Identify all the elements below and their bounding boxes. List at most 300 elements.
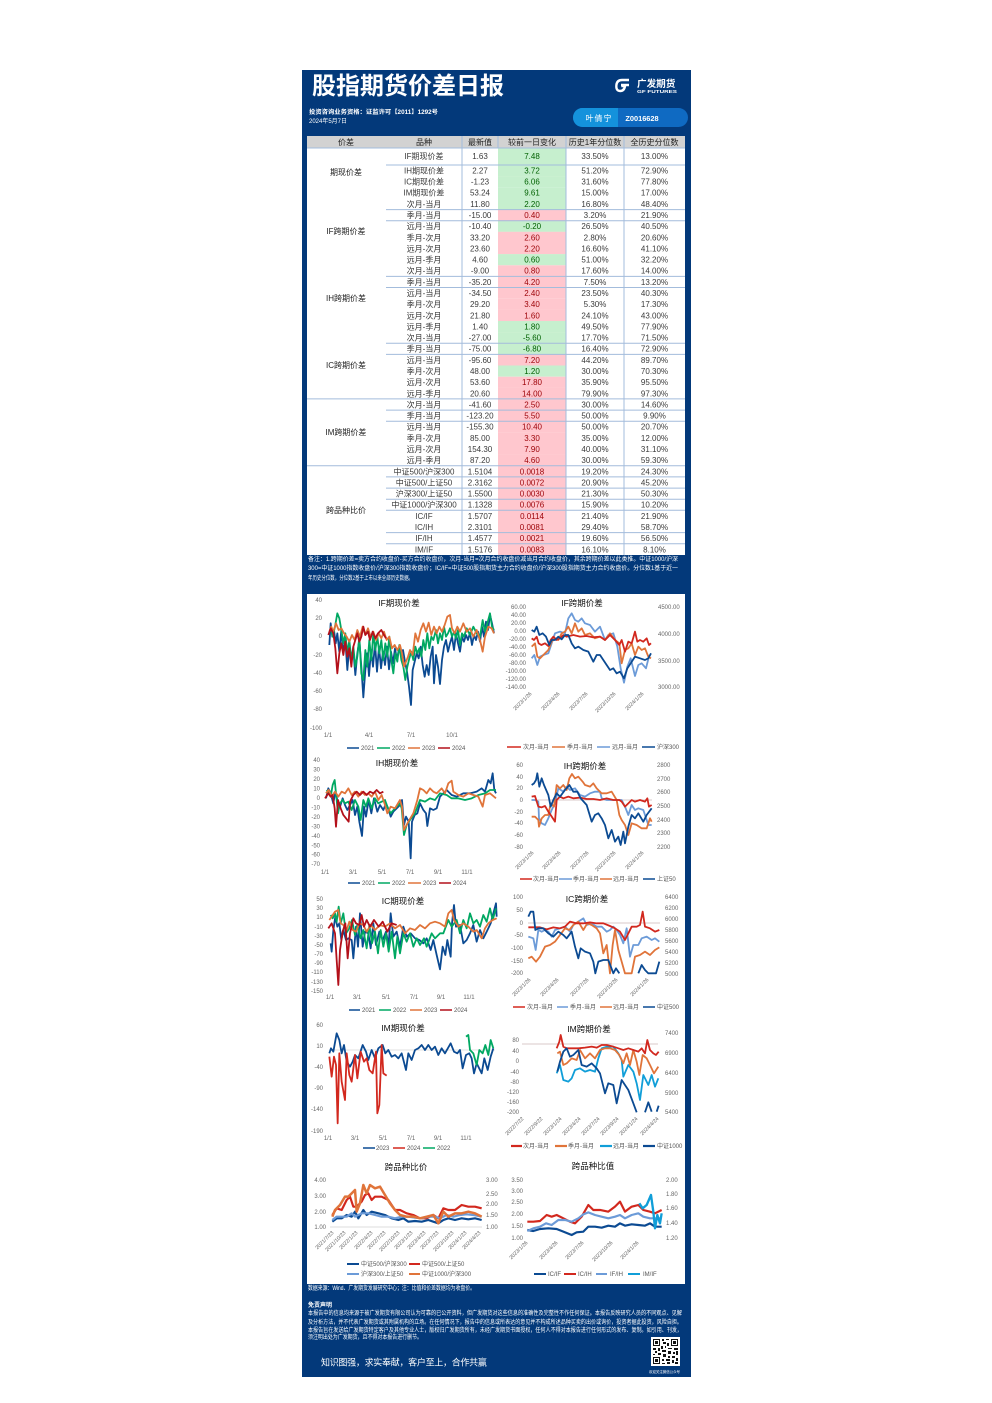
group: IC跨期价差: 48.00 — [470, 367, 491, 376]
table header row: 全历史分位数 — [630, 137, 678, 147]
chart: IM跨期价差: -40 — [510, 1070, 520, 1076]
chart: 跨品种比价: 4.00 — [314, 1178, 327, 1184]
group: 跨品种比价: 0.0018 — [520, 467, 545, 476]
chart: IF跨期价差: 2023/10/26 — [594, 691, 617, 714]
chart: 跨品种比价: 3.00 — [314, 1194, 327, 1200]
group: IC跨期价差: IC跨期价差 — [326, 360, 366, 370]
chart: IM跨期价差: IM跨期价差 — [567, 1024, 611, 1034]
group: 跨品种比价: 沪深300/上证50 — [396, 488, 453, 498]
group: 跨品种比价: 1.5104 — [468, 467, 493, 476]
data source: 数据来源：Wind、广发期货发展研究中心；注：比值和价差数据均为收盘价。 — [308, 1284, 475, 1292]
table header row: 价差 — [338, 137, 354, 147]
group: IF跨期价差: -0.20 — [523, 222, 542, 231]
chart: IF期现价差: IF期现价差 — [378, 598, 420, 608]
chart: IH期现价差: 7/1 — [406, 870, 415, 876]
chart: IH期现价差: -10 — [311, 806, 321, 812]
table note: 年历史分位数，分位数2基于上市以来全部历史数据。 — [308, 574, 413, 582]
chart: IC跨期价差: 0 — [520, 921, 524, 927]
chart: IM期现价差: 10 — [316, 1044, 324, 1050]
chart: IH跨期价差: IH跨期价差 — [564, 761, 606, 771]
chart: IM跨期价差: 2023/1/24 — [542, 1116, 563, 1137]
group: IM跨期价差: 59.30% — [641, 456, 668, 465]
group: IH跨期价差: -35.20 — [469, 278, 492, 287]
chart: 跨品种比价: 沪深300/上证50 — [361, 1270, 404, 1278]
group: 跨品种比价: 8.10% — [643, 545, 666, 554]
group: IF跨期价差: 41.10% — [641, 244, 668, 253]
chart: IH跨期价差: 2700 — [657, 777, 671, 783]
group: 跨品种比价: 2.3162 — [468, 478, 493, 487]
group: IC跨期价差: 季月-次月 — [407, 366, 441, 376]
chart: IM跨期价差: 2024/4/24 — [639, 1116, 660, 1137]
group: IH跨期价差: 2.40 — [524, 289, 540, 298]
chart: IC跨期价差: 2023/7/26 — [569, 977, 590, 998]
group: 跨品种比价: 21.90% — [641, 512, 668, 521]
chart: 跨品种比值: 1.50 — [511, 1224, 524, 1230]
chart: IF跨期价差: 2023/7/26 — [568, 691, 589, 712]
chart: IF跨期价差: 3500.00 — [658, 659, 680, 665]
chart: 跨品种比值: IC/IH — [578, 1272, 592, 1278]
group: 期现价差: 2.27 — [472, 166, 488, 175]
chart: IC跨期价差: -150 — [511, 959, 524, 965]
chart: IC期现价差: -30 — [314, 934, 324, 940]
chart: IH跨期价差: 2023/1/26 — [514, 850, 535, 871]
chart: IH期现价差: 20 — [313, 777, 321, 783]
chart: IH期现价差: 10 — [313, 786, 321, 792]
group: 跨品种比价: IC/IH — [415, 523, 433, 532]
chart: IF期现价差: -80 — [313, 707, 323, 713]
disclaimer: 及分析方法，并不代表广发期货或其附属机构的立场。在任何情况下，报告中的信息或所表达的意见并不构成所述品种买卖的出价或询价，投资者据此投资，风险自担。 — [308, 1318, 682, 1326]
chart: IC跨期价差: -200 — [511, 971, 524, 977]
charts panel — [307, 594, 685, 1284]
chart: 跨品种比值: 跨品种比值 — [572, 1161, 615, 1171]
group: IF跨期价差: 33.20 — [470, 233, 491, 242]
chart: IM跨期价差: 中证1000 — [657, 1142, 683, 1150]
table header row: 最新值 — [468, 137, 492, 147]
group: 跨品种比价: 21.40% — [581, 512, 609, 521]
group: 期现价差: -1.23 — [471, 178, 490, 186]
chart: IM期现价差: 1/1 — [324, 1136, 333, 1142]
group: 跨品种比价: 24.30% — [641, 467, 668, 476]
chart: IM跨期价差: 5900 — [665, 1091, 679, 1097]
group: IM跨期价差: 远月-次月 — [407, 444, 441, 454]
group: IH跨期价差: -9.00 — [471, 267, 490, 276]
group: IH跨期价差: 21.80 — [470, 311, 491, 320]
group: IH跨期价差: 49.50% — [581, 322, 609, 331]
group: 跨品种比价: 58.70% — [641, 523, 668, 532]
group: IM跨期价差: 14.60% — [641, 400, 668, 409]
chart: IM期现价差: 7/1 — [407, 1136, 416, 1142]
group: IH跨期价差: 77.90% — [641, 322, 668, 331]
group: 跨品种比价: 15.90% — [581, 501, 609, 510]
group: IH跨期价差: 3.40 — [524, 300, 540, 309]
group: 期现价差: 17.00% — [641, 189, 668, 198]
group: 跨品种比价: 中证500/沪深300 — [394, 466, 455, 476]
chart: IH期现价差: 3/1 — [349, 870, 358, 876]
group: IM跨期价差: 35.00% — [581, 434, 609, 443]
disclaimer — [308, 1301, 682, 1341]
chart: IM跨期价差: 2022/9/22 — [523, 1116, 544, 1137]
chart: IH期现价差: 2023 — [423, 881, 437, 887]
chart: IH期现价差: 0 — [317, 796, 321, 802]
chart: IC跨期价差: 5800 — [665, 928, 679, 934]
group: IF跨期价差: 季月-当月 — [407, 210, 441, 220]
group: 跨品种比价: 0.0081 — [520, 523, 545, 532]
chart: IM期现价差: 11/1 — [460, 1136, 472, 1142]
chart: IC期现价差: -10 — [314, 925, 324, 931]
chart: IH期现价差: IH期现价差 — [376, 758, 418, 768]
chart: IM跨期价差: -160 — [507, 1100, 520, 1106]
chart: IF期现价差: 10/1 — [446, 733, 458, 739]
chart: IC跨期价差: 5000 — [665, 972, 679, 978]
group: IM跨期价差: 50.00% — [581, 412, 609, 420]
chart: IF期现价差: 4/1 — [365, 733, 374, 739]
group: IF跨期价差: 16.80% — [581, 200, 609, 209]
chart: IM跨期价差: -80 — [510, 1080, 520, 1086]
chart: IF期现价差: -20 — [313, 653, 323, 659]
chart: IC期现价差: -70 — [314, 952, 324, 958]
group: IM跨期价差: -41.60 — [469, 400, 492, 409]
group: IC跨期价差: 7.20 — [524, 356, 540, 365]
group: IF跨期价差 — [326, 198, 668, 265]
group: IC跨期价差: -75.00 — [469, 345, 492, 354]
group: 跨品种比价: 16.10% — [581, 545, 609, 554]
group: 跨品种比价: 中证1000/沪深300 — [391, 500, 457, 510]
group: IM跨期价差: 远月-当月 — [407, 422, 441, 432]
chart: 跨品种比价: 2024/1/23 — [447, 1230, 468, 1251]
group: 跨品种比价: 0.0072 — [520, 478, 545, 487]
chart: IM跨期价差: 2023/9/24 — [599, 1116, 620, 1137]
table note: 备注：1.跨期价差=卖方合约收盘价-买方合约收盘价，次月-当月=次月合约收盘价减当月合约收盘价，其余跨期价差以此类推。中证1000/沪深 — [308, 555, 678, 563]
group: IM跨期价差: 9.90% — [643, 412, 666, 420]
group: IM跨期价差: 87.20 — [470, 456, 491, 465]
table background — [307, 148, 685, 555]
chart: 跨品种比价: 中证1000/沪深300 — [422, 1270, 472, 1278]
group: 期现价差: 51.20% — [581, 166, 609, 175]
chart: IH跨期价差: -40 — [514, 821, 524, 827]
chart: IH跨期价差: 2024/1/26 — [624, 850, 645, 871]
group: IC跨期价差: 远月-次月 — [407, 377, 441, 387]
group: IM跨期价差: IM跨期价差 — [326, 427, 366, 437]
chart: IF期现价差: -100 — [310, 726, 323, 732]
chart: 跨品种比值: 2024/1/26 — [619, 1240, 640, 1261]
chart: 跨品种比价: 3.00 — [486, 1178, 498, 1184]
chart: 跨品种比价: 2023/10/23 — [432, 1230, 455, 1253]
chart: IF跨期价差: IF跨期价差 — [561, 598, 603, 608]
chart: 跨品种比值: 2023/7/26 — [564, 1240, 585, 1261]
group: IM跨期价差: 85.00 — [470, 434, 491, 443]
chart: 跨品种比价: 中证500/沪深300 — [361, 1260, 407, 1268]
chart: IF跨期价差: 次月-当月 — [523, 743, 549, 751]
group: 跨品种比价: 0.0114 — [520, 512, 544, 521]
group: IM跨期价差: 远月-季月 — [407, 455, 441, 465]
chart: IH期现价差: -50 — [311, 844, 321, 850]
chart: IC跨期价差: 2023/10/26 — [596, 977, 619, 1000]
table header row: 历史1年分位数 — [569, 137, 621, 147]
group: 跨品种比价: 1.5500 — [468, 490, 493, 498]
chart: IC期现价差: 30 — [316, 906, 324, 912]
group: IC跨期价差: -27.00 — [469, 334, 492, 342]
chart: IM期现价差: -90 — [314, 1086, 324, 1092]
header — [309, 73, 688, 127]
chart: IM期现价差 — [311, 1023, 495, 1152]
group: IF跨期价差: 20.60% — [641, 233, 668, 242]
group: IH跨期价差: 1.40 — [472, 322, 488, 331]
chart: 跨品种比值: 1.20 — [666, 1236, 678, 1242]
chart: IM跨期价差: 40 — [512, 1049, 520, 1055]
chart: 跨品种比价 — [314, 1162, 498, 1278]
background panel — [302, 70, 691, 1377]
group: IF跨期价差: 16.60% — [581, 244, 609, 253]
group: 跨品种比价: 0.0021 — [520, 534, 545, 543]
chart: 跨品种比价: 2024/4/23 — [461, 1230, 482, 1251]
chart: 跨品种比值: 2.00 — [511, 1212, 524, 1218]
group: IC跨期价差: 季月-当月 — [407, 344, 441, 354]
group: IH跨期价差: 17.30% — [641, 300, 668, 309]
chart: IF跨期价差: 2024/1/26 — [624, 691, 645, 712]
disclaimer: 须注明出处为广发期货，且不得对本报告进行删节。 — [308, 1333, 422, 1341]
group: IM跨期价差: 10.40 — [522, 423, 543, 432]
table note — [308, 555, 678, 582]
group: IC跨期价差: 35.90% — [581, 378, 609, 387]
chart: IH期现价差 — [311, 758, 496, 887]
group: IC跨期价差: 14.00 — [522, 389, 543, 398]
group: 跨品种比价: 1.1328 — [468, 501, 493, 510]
chart: IF期现价差 — [310, 598, 494, 752]
chart: IH跨期价差: 40 — [516, 775, 524, 781]
group: 期现价差: 7.48 — [524, 152, 540, 161]
group: IF跨期价差: 远月-次月 — [407, 243, 441, 253]
chart: 跨品种比价: 1.00 — [486, 1225, 498, 1231]
chart: IH跨期价差: 远月-当月 — [613, 875, 639, 883]
chart: IC跨期价差: 季月-当月 — [570, 1003, 596, 1011]
chart: IC期现价差: IC期现价差 — [382, 896, 424, 906]
group: IF跨期价差: 次月-当月 — [407, 199, 441, 209]
chart: IC跨期价差: 100 — [513, 895, 524, 901]
group: 期现价差: 33.50% — [581, 152, 609, 161]
chart: IF期现价差: 1/1 — [324, 733, 333, 739]
chart: IH期现价差: -30 — [311, 824, 321, 830]
group: 期现价差: IH期现价差 — [404, 165, 444, 175]
chart: IF跨期价差: -60.00 — [509, 653, 527, 659]
chart: IM期现价差: 60 — [316, 1023, 324, 1029]
group: 跨品种比价: 跨品种比价 — [326, 505, 366, 515]
chart: IC期现价差 — [311, 896, 497, 1014]
group: IC跨期价差: 20.60 — [470, 389, 491, 398]
chart: 跨品种比价: 2022/7/23 — [366, 1230, 387, 1251]
group: IH跨期价差: 24.10% — [581, 311, 609, 320]
group: 期现价差: 9.61 — [524, 189, 540, 198]
group: IH跨期价差 — [326, 265, 668, 332]
group: 跨品种比价: 0.0083 — [520, 545, 545, 554]
chart: IM期现价差: -190 — [311, 1129, 324, 1135]
chart: IH期现价差: 2022 — [392, 881, 406, 887]
chart: IF跨期价差: -80.00 — [509, 661, 527, 667]
group: IM跨期价差: -155.30 — [466, 423, 494, 432]
chart: IC期现价差: -50 — [314, 943, 324, 949]
chart: IF期现价差: 2021 — [361, 746, 375, 752]
group: 期现价差: 72.90% — [641, 166, 668, 175]
chart: IH期现价差: 40 — [313, 758, 321, 764]
QR caption: 欢迎关注微信公众号 — [649, 1369, 680, 1374]
table header row: 品种 — [416, 137, 432, 147]
group: IF跨期价差: 2.80% — [584, 233, 606, 242]
chart: IM跨期价差: 2024/1/24 — [618, 1116, 639, 1137]
chart: IH跨期价差: 20 — [516, 786, 524, 792]
chart: IC期现价差: 1/1 — [326, 995, 335, 1001]
chart: 跨品种比值 — [508, 1161, 678, 1278]
group: IC跨期价差: 97.30% — [641, 389, 668, 398]
group: 期现价差: IF期现价差 — [404, 151, 444, 161]
chart: 跨品种比值: 2.00 — [666, 1178, 678, 1184]
chart: 跨品种比值: 3.50 — [511, 1178, 524, 1184]
chart: IC跨期价差: 次月-当月 — [527, 1003, 553, 1011]
chart: 跨品种比价: 2022/4/23 — [353, 1230, 374, 1251]
chart: IF跨期价差: 2023/1/26 — [512, 691, 533, 712]
chart: IC跨期价差: 6400 — [665, 895, 679, 901]
chart: IC期现价差: 10 — [316, 915, 324, 921]
chart: IC跨期价差: 5400 — [665, 950, 679, 956]
group: IC跨期价差: 70.30% — [641, 367, 668, 376]
chart: IC期现价差: 5/1 — [382, 995, 391, 1001]
group: IC跨期价差: -6.80 — [523, 345, 542, 354]
chart: IM期现价差: 2024 — [407, 1146, 421, 1152]
table header row: 较前一日变化 — [508, 137, 556, 147]
group: IC跨期价差 — [326, 332, 668, 399]
group: IH跨期价差: 远月-季月 — [407, 321, 441, 331]
chart: IF期现价差: 2024 — [452, 746, 466, 752]
chart: IH期现价差: -60 — [311, 852, 321, 858]
chart: 跨品种比价: 2.00 — [486, 1202, 498, 1208]
group: IM跨期价差: 12.00% — [641, 434, 668, 443]
group: IH跨期价差: 40.30% — [641, 289, 668, 298]
group: IC跨期价差: 44.20% — [581, 356, 609, 365]
chart: IF期现价差: 20 — [315, 616, 323, 622]
group: 跨品种比价: 56.50% — [641, 534, 668, 543]
group: IM跨期价差: -123.20 — [466, 412, 494, 420]
chart: 跨品种比值: 2023/1/26 — [508, 1240, 529, 1261]
group: IH跨期价差: 次月-当月 — [407, 266, 441, 276]
chart: IF期现价差: 2022 — [392, 746, 406, 752]
group: IF跨期价差: 26.50% — [581, 222, 609, 231]
group: IM跨期价差: 4.60 — [524, 456, 540, 465]
chart: IH跨期价差: 2800 — [657, 763, 671, 769]
chart: 跨品种比值: IF/IH — [610, 1272, 623, 1278]
chart: IH期现价差: 9/1 — [434, 870, 443, 876]
chart: 跨品种比价: 中证500/上证50 — [422, 1260, 465, 1268]
chart: IF跨期价差: 2023/4/26 — [540, 691, 561, 712]
chart: 跨品种比值: 2.50 — [511, 1200, 524, 1206]
group: IF跨期价差: 2.60 — [524, 233, 540, 242]
chart: 跨品种比价: 2023/7/23 — [419, 1230, 440, 1251]
group: 期现价差: 3.72 — [524, 166, 540, 175]
group: IF跨期价差: 32.20% — [641, 256, 668, 264]
group: IC跨期价差: 71.50% — [641, 334, 668, 342]
date: 2024年5月7日 — [309, 117, 347, 125]
group: IC跨期价差: 远月-当月 — [407, 355, 441, 365]
group: 期现价差: 15.00% — [581, 189, 609, 198]
group: 跨品种比价: 29.40% — [581, 523, 609, 532]
group: 跨品种比价: 0.0030 — [520, 490, 545, 498]
chart: IF跨期价差: 3000.00 — [658, 685, 680, 691]
group: IF跨期价差: 40.50% — [641, 222, 668, 231]
chart: IC期现价差: 50 — [316, 897, 324, 903]
chart: IH跨期价差: 0 — [520, 798, 524, 804]
chart: 跨品种比值: 1.60 — [666, 1206, 678, 1212]
chart: 跨品种比价: 2022/10/23 — [378, 1230, 401, 1253]
chart: IC期现价差: 9/1 — [437, 995, 446, 1001]
chart: IC跨期价差: 5600 — [665, 939, 679, 945]
chart: IH跨期价差 — [514, 761, 676, 883]
chart: IC跨期价差: 2024/1/26 — [629, 977, 650, 998]
group: IH跨期价差: 0.80 — [524, 267, 540, 276]
chart: IC跨期价差: 2023/4/26 — [539, 977, 560, 998]
chart: IC跨期价差: -50 — [514, 933, 524, 939]
chart: IF期现价差: 0 — [319, 634, 323, 640]
chart: IM跨期价差: 5400 — [665, 1110, 679, 1116]
chart: IH期现价差: -70 — [311, 862, 321, 868]
slogan: 知识图强，求实奉献，客户至上，合作共赢 — [321, 1356, 487, 1368]
chart: IM跨期价差: 2022/7/22 — [504, 1116, 525, 1137]
group: 期现价差: 6.06 — [524, 178, 540, 186]
chart: IM跨期价差: -200 — [507, 1110, 520, 1116]
chart: 跨品种比值: 2023/4/26 — [538, 1240, 559, 1261]
chart: IH跨期价差: 上证50 — [657, 875, 676, 883]
group: IM跨期价差: 次月-当月 — [407, 399, 441, 409]
chart: IF跨期价差: 60.00 — [511, 605, 527, 611]
chart: IH期现价差: 5/1 — [378, 870, 387, 876]
chart: IM跨期价差: 80 — [512, 1038, 520, 1044]
group: IH跨期价差: 13.20% — [641, 278, 668, 287]
chart: IF跨期价差: -100.00 — [506, 669, 527, 675]
chart: 跨品种比价: 跨品种比价 — [385, 1162, 428, 1172]
group: IH跨期价差: 17.60% — [581, 267, 609, 276]
group: 跨品种比价: 0.0076 — [520, 501, 545, 510]
group: IH跨期价差: 23.50% — [581, 289, 609, 298]
group: IF跨期价差: 23.60 — [470, 244, 491, 253]
group: IH跨期价差: 远月-当月 — [407, 288, 441, 298]
group: 跨品种比价: 50.30% — [641, 490, 668, 498]
group: IC跨期价差: 72.90% — [641, 345, 668, 354]
group: 跨品种比价 — [326, 466, 668, 555]
group: IM跨期价差: 7.90 — [524, 445, 540, 454]
chart: IC期现价差: 2022 — [393, 1008, 407, 1014]
icon: GF Futures logo — [616, 78, 677, 94]
group: 跨品种比价: 中证500/上证50 — [396, 477, 453, 487]
group: 跨品种比价: 1.5176 — [468, 545, 493, 554]
group: IM跨期价差: 50.00% — [581, 423, 609, 432]
group: IF跨期价差: 远月-季月 — [407, 254, 441, 264]
group: IC跨期价差: -5.60 — [523, 334, 542, 342]
group: 跨品种比价: 19.20% — [581, 467, 609, 476]
group: IM跨期价差: 季月-次月 — [407, 433, 441, 443]
chart: 跨品种比价: 1.00 — [314, 1225, 327, 1231]
chart: IM跨期价差: 7400 — [665, 1031, 679, 1037]
group: IC跨期价差: 95.50% — [641, 378, 668, 387]
group: IF跨期价差: 3.20% — [584, 211, 606, 220]
group: IH跨期价差: 5.30% — [584, 300, 606, 309]
group: IF跨期价差: 21.90% — [641, 211, 668, 220]
group: 跨品种比价: 20.90% — [581, 478, 609, 487]
chart: IH跨期价差: 2600 — [657, 790, 671, 796]
chart: IM期现价差: 5/1 — [379, 1136, 388, 1142]
group: IH跨期价差: 7.50% — [584, 278, 606, 287]
chart: IM跨期价差: 6400 — [665, 1071, 679, 1077]
group: IC跨期价差: 53.60 — [470, 378, 491, 387]
group: IH跨期价差: 季月-当月 — [407, 277, 441, 287]
chart: IC跨期价差: 2023/1/26 — [511, 977, 532, 998]
group: IM跨期价差: 季月-当月 — [407, 410, 441, 420]
group: IC跨期价差: 17.70% — [581, 334, 609, 342]
